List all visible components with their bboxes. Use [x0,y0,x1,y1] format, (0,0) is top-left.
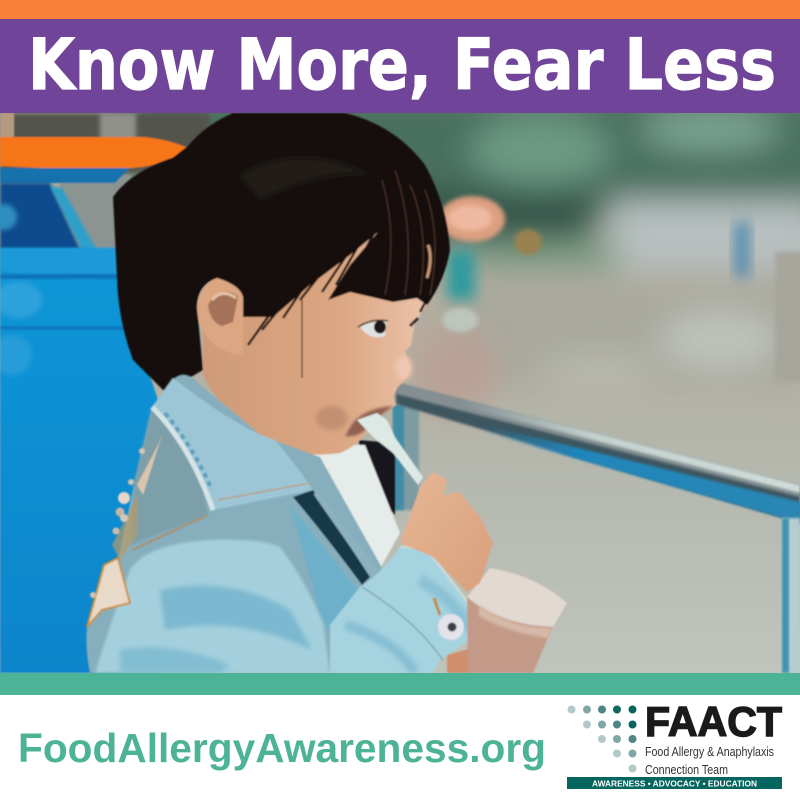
jacket body [86,374,383,673]
footer panel [0,695,800,800]
logo tagline band [567,777,782,789]
hair with ponytail [113,113,450,392]
jacket collar [152,378,313,510]
button [434,598,464,640]
neck and shirt [314,444,400,566]
face [203,225,430,455]
green divider bar [0,673,800,695]
hand [400,472,493,592]
forearm cuff [329,547,468,673]
jacket shoulder back [130,407,208,545]
dark gap behind shirt [358,440,395,515]
other hand [446,648,469,673]
cup [467,568,567,673]
jacket sleeve [95,540,330,673]
railing [393,382,800,673]
FAACT logo [567,698,782,789]
embellishment star and pearls [87,432,163,627]
eye [360,322,387,337]
spoon [357,413,423,485]
logo name [645,744,774,777]
photo: child eating with spoon [0,90,800,673]
blue and orange seat [0,113,210,673]
top orange bar [0,0,800,19]
logo name: Food Allergy & Anaphylaxis [645,744,774,759]
title banner [0,19,800,113]
child [86,113,567,673]
ear [197,278,243,355]
jacket placket [293,490,370,585]
logo tagline band: AWARENESS • ADVOCACY • EDUCATION [592,778,757,788]
bang strands [248,170,435,378]
food smear and mouth [316,406,348,430]
blurred background scenery [0,90,800,673]
logo wordmark: FAACT [645,698,782,745]
website url: FoodAllergyAwareness.org [18,725,546,771]
icon: dot triangle [568,706,636,772]
logo name: Connection Team [645,762,728,777]
stray hair over cheek [301,300,303,378]
